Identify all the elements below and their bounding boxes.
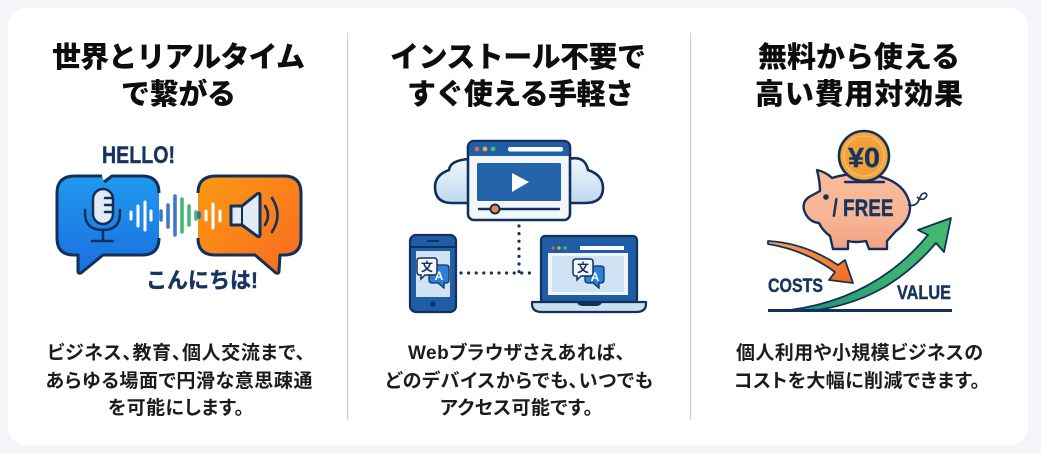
body text: cost [734, 342, 983, 392]
connector: dotted lines [461, 226, 536, 273]
body text: cost: コストを大幅に削減できます。 [734, 369, 980, 392]
icon: laptop [532, 236, 646, 312]
heading: no install [390, 34, 646, 113]
label: konnichiwa: こんにちは! [146, 268, 258, 293]
icon: translate bubbles: A [591, 270, 600, 284]
heading: realtime [52, 34, 305, 113]
icon: translate bubbles [573, 259, 604, 288]
heading: cost: 無料から使える [758, 34, 960, 76]
icon: cloud [435, 158, 603, 203]
body text: no install: アクセス可能です。 [440, 397, 593, 419]
icon: translate bubbles: 文 [421, 258, 433, 275]
heading: realtime: 世界とリアルタイム [52, 34, 305, 76]
body text: no install: どのデバイスからでも、いつでも [385, 369, 653, 392]
icon: browser window with video [468, 141, 570, 220]
icon: smartphone [410, 235, 456, 312]
heading: no install: インストール不要で [390, 34, 646, 76]
icon: piggy bank and arrows [768, 131, 952, 312]
icon: cloud and devices [410, 141, 646, 312]
body text: realtime: ビジネス、教育、個人交流まで、 [47, 342, 305, 364]
panel: no install [385, 34, 653, 419]
icon: translate bubbles [417, 258, 449, 288]
icon: sound wave [131, 196, 220, 235]
label: value: VALUE [897, 283, 951, 304]
divider left [347, 33, 348, 420]
body text: cost: 個人利用や小規模ビジネスの [736, 342, 983, 364]
label: free: / FREE [832, 195, 894, 222]
icon: translation speech bubbles [57, 142, 301, 293]
label: costs: COSTS [768, 276, 823, 297]
icon: translate bubbles: A [435, 269, 444, 283]
label: HELLO: HELLO! [102, 142, 175, 169]
body text: no install [385, 341, 653, 419]
body text: no install: Webブラウザさえあれば、 [408, 341, 625, 364]
heading: realtime: で繋がる [121, 71, 236, 113]
body text: realtime: を可能にします。 [108, 397, 244, 419]
icon: coin: ¥0 [848, 142, 880, 173]
icon: orange speech bubble with speaker [198, 176, 301, 273]
heading: cost: 高い費用対効果 [755, 71, 963, 113]
divider right [690, 33, 691, 420]
panel: realtime connection [46, 34, 312, 419]
icon: piggy bank [804, 170, 927, 249]
arrow: costs down [768, 241, 853, 283]
body text: realtime [46, 342, 312, 419]
icon: coin [839, 131, 889, 181]
panel: cost [734, 34, 983, 392]
icon: blue speech bubble with microphone [57, 176, 159, 273]
heading: no install: すぐ使える手軽さ [407, 71, 634, 113]
axis line [768, 309, 952, 312]
heading: cost [755, 34, 963, 113]
arrow: value up [790, 218, 951, 311]
body text: realtime: あらゆる場面で円滑な意思疎通 [46, 370, 312, 392]
icon: translate bubbles: 文 [577, 259, 589, 276]
